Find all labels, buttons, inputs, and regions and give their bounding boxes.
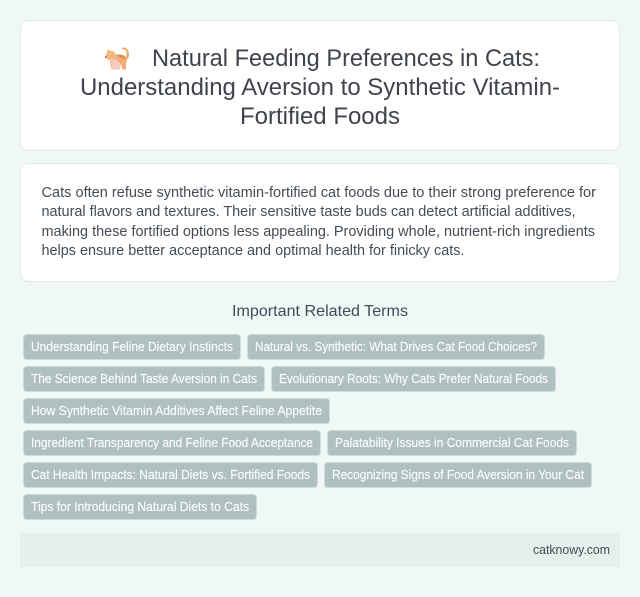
tag: [272, 366, 556, 392]
tag: Cat Health Impacts: Natural Diets vs. Fortified Foods: [31, 467, 310, 482]
tag: Evolutionary Roots: Why Cats Prefer Natural Foods: [279, 371, 548, 386]
icon: cat: [105, 47, 129, 70]
tag: Ingredient Transparency and Feline Food Acceptance: [31, 435, 313, 450]
intro panel: making these fortified options less appealing. Providing whole, nutrient-rich ingredients: [42, 223, 595, 240]
tag: [248, 334, 544, 360]
heading: related terms: Important Related Terms: [232, 303, 408, 320]
tag: [24, 462, 318, 488]
tag: [24, 494, 256, 520]
title panel: Fortified Foods: [240, 103, 400, 130]
tag: [24, 334, 240, 360]
tag: How Synthetic Vitamin Additives Affect Feline Appetite: [31, 403, 322, 418]
tag: Palatability Issues in Commercial Cat Foods: [335, 435, 569, 450]
intro panel: Cats often refuse synthetic vitamin-fortified cat foods due to their strong preference for: [42, 184, 596, 201]
tag: [24, 430, 320, 456]
tag: Recognizing Signs of Food Aversion in Your Cat: [332, 467, 584, 482]
tag: [24, 398, 330, 424]
tag list: [24, 334, 592, 520]
title panel: [20, 20, 620, 150]
footer: catknowy.com: [533, 542, 610, 557]
tag: [324, 462, 592, 488]
intro panel: natural flavors and textures. Their sensitive taste buds can detect artificial additives,: [42, 203, 576, 220]
title panel: Natural Feeding Preferences in Cats:: [152, 45, 540, 72]
tag: The Science Behind Taste Aversion in Cats: [31, 371, 257, 386]
tag: [24, 366, 264, 392]
tag: Natural vs. Synthetic: What Drives Cat Food Choices?: [255, 339, 537, 354]
intro panel: [20, 164, 620, 282]
tag: Tips for Introducing Natural Diets to Cats: [31, 499, 249, 514]
footer: [20, 533, 620, 567]
tag: [328, 430, 576, 456]
intro panel: helps ensure better acceptance and optimal health for finicky cats.: [42, 242, 464, 259]
tag: Understanding Feline Dietary Instincts: [31, 339, 233, 354]
title panel: Understanding Aversion to Synthetic Vitamin-: [80, 74, 560, 101]
